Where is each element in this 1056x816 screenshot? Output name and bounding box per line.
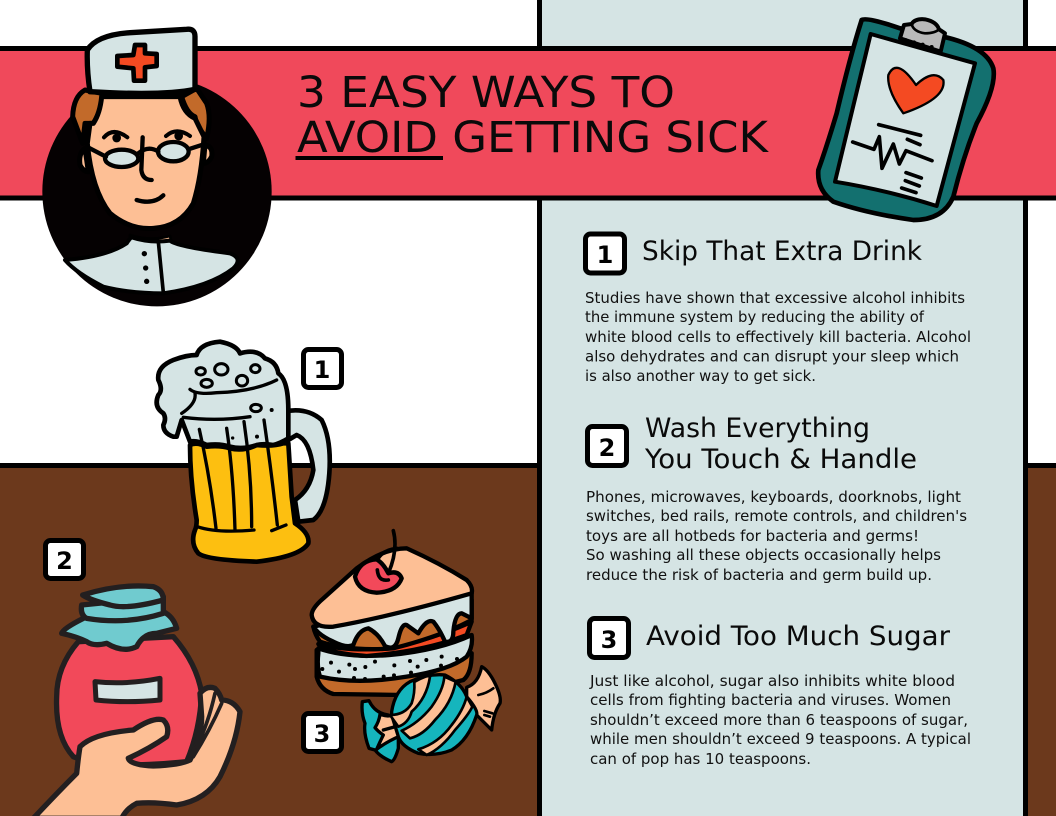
tip 1 body [585, 289, 971, 385]
tip 2 body: So washing all these objects occasionally helps [586, 546, 941, 564]
tip 3 number badge [590, 618, 628, 658]
title banner [0, 48, 1056, 198]
illustration badge 3 [304, 714, 342, 752]
tip 3 body: Just like alcohol, sugar also inhibits white blood [589, 672, 955, 690]
tip 1 body: white blood cells to effectively kill bacteria. Alcohol [585, 328, 971, 346]
icon: striped candy [362, 667, 500, 762]
tip 1 number badge [586, 234, 624, 273]
tip 2 body: switches, bed rails, remote controls, and children's [586, 507, 967, 525]
tip 1 body: is also another way to get sick. [585, 367, 816, 385]
tip 1 heading: Skip That Extra Drink [642, 236, 922, 267]
tip 3 [589, 618, 971, 768]
background: brown table [0, 466, 1056, 816]
icon: nurse portrait [42, 29, 272, 306]
tip 3 number badge: 3 [601, 626, 617, 654]
icon: jam jar in hand [33, 586, 240, 816]
icon: beer mug [157, 342, 330, 562]
title [296, 69, 769, 163]
tip 3 heading: Avoid Too Much Sugar [646, 621, 951, 652]
tip 1 body: the immune system by reducing the ability of [585, 308, 925, 326]
tip 3 body: cells from fighting bacteria and viruses. Women [590, 691, 951, 709]
icon: cake slice [312, 531, 472, 695]
tip 2 number badge: 2 [599, 434, 615, 462]
tip 1 body: Studies have shown that excessive alcohol inhibits [585, 289, 965, 307]
tip 2 heading: Wash Everything [645, 413, 870, 444]
tip 2 body: toys are all hotbeds for bacteria and germs! [586, 527, 919, 545]
title: 3 EASY WAYS TO [297, 69, 675, 118]
tip 1 number badge: 1 [597, 241, 613, 269]
tip 1 body: also dehydrates and can disrupt your sleep which [585, 348, 959, 366]
tip 1 [585, 234, 971, 385]
tip 2 body: Phones, microwaves, keyboards, doorknobs, light [586, 488, 961, 506]
illustration badge 3: 3 [314, 720, 330, 748]
tip 2 body [586, 488, 967, 584]
tip 2 number badge [588, 426, 626, 466]
tip 3 body: while men shouldn’t exceed 9 teaspoons. A typical [590, 730, 971, 748]
tip 2 heading: You Touch & Handle [644, 444, 917, 475]
title: AVOID GETTING SICK [297, 114, 769, 163]
illustration badge 1: 1 [314, 356, 330, 384]
icon: clipboard [818, 19, 994, 220]
tip 2 body: reduce the risk of bacteria and germ build up. [586, 566, 932, 584]
tip 3 body: shouldn’t exceed more than 6 teaspoons of sugar, [590, 711, 968, 729]
tip 2 heading [644, 413, 917, 475]
panel: tips column [540, 0, 1026, 816]
tip 2 [586, 413, 967, 584]
illustration badge 2 [46, 540, 84, 578]
tip 3 body: can of pop has 10 teaspoons. [590, 750, 811, 768]
tip 3 body [589, 672, 971, 768]
illustration badge 2: 2 [56, 547, 73, 575]
illustration badge 1 [304, 350, 342, 388]
